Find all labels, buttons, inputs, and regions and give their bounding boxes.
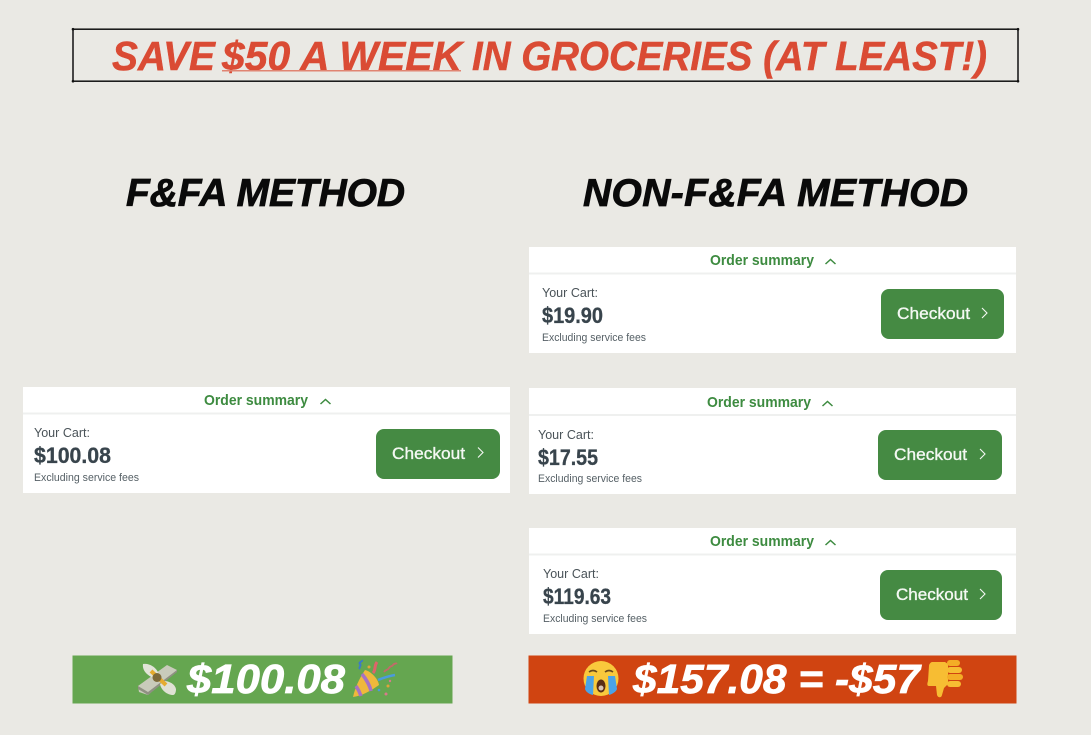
panel: non-F&FA order summary $19.90: Your Cart:	[542, 286, 598, 300]
panel: non-F&FA order summary $119.63: Checkout	[896, 585, 968, 604]
icon: thumbs down	[927, 660, 963, 697]
panel: non-F&FA order summary $17.55: $17.55	[538, 445, 598, 470]
panel: non-F&FA order summary $19.90: Excluding service fees	[542, 332, 646, 344]
panel: non-F&FA order summary $17.55: Your Cart:	[538, 428, 594, 442]
panel: non-F&FA order summary $19.90: $19.90	[542, 303, 603, 328]
panel: non-F&FA order summary $19.90: Checkout	[897, 304, 970, 323]
icon: loudly crying face	[584, 661, 618, 696]
panel: non-F&FA order summary $17.55	[529, 388, 1016, 494]
panel: F&FA order summary $100.08	[23, 387, 510, 493]
panel: non-F&FA order summary $119.63: Order summary	[710, 533, 815, 550]
panel: non-F&FA order summary $119.63	[529, 528, 1016, 634]
total amount and difference: $157.08 = -$57	[632, 656, 922, 702]
icon: money with wings	[138, 664, 177, 695]
panel: F&FA order summary $100.08: Your Cart:	[34, 426, 90, 440]
heading: F&FA method: F&FA METHOD	[126, 172, 405, 215]
icon: party popper	[353, 660, 397, 697]
title text: $50 A WEEK	[221, 33, 465, 79]
panel: non-F&FA order summary $19.90	[529, 247, 1016, 353]
panel: F&FA order summary $100.08: Order summary	[204, 392, 309, 409]
title banner	[72, 28, 1019, 82]
panel: non-F&FA total	[528, 656, 1016, 704]
panel: non-F&FA order summary $119.63: Excluding service fees	[543, 613, 647, 625]
panel: F&FA order summary $100.08: $100.08	[34, 443, 111, 468]
panel: non-F&FA order summary $17.55: Checkout	[894, 445, 967, 464]
title text: SAVE	[112, 33, 217, 79]
panel: F&FA order summary $100.08: Checkout	[392, 444, 465, 463]
panel: F&FA order summary $100.08: Excluding service fees	[34, 472, 139, 484]
panel: F&FA total	[72, 656, 452, 704]
panel: non-F&FA order summary $19.90: Order summary	[710, 252, 815, 269]
panel: non-F&FA order summary $17.55: Order summary	[707, 394, 812, 411]
panel: non-F&FA order summary $119.63: Your Cart:	[543, 567, 599, 581]
panel: non-F&FA order summary $17.55: Excluding service fees	[538, 473, 642, 485]
total amount: $100.08	[186, 656, 345, 702]
heading: non-F&FA method: NON-F&FA METHOD	[583, 172, 968, 215]
title text: IN GROCERIES (AT LEAST!)	[472, 33, 987, 79]
panel: non-F&FA order summary $119.63: $119.63	[543, 584, 611, 609]
